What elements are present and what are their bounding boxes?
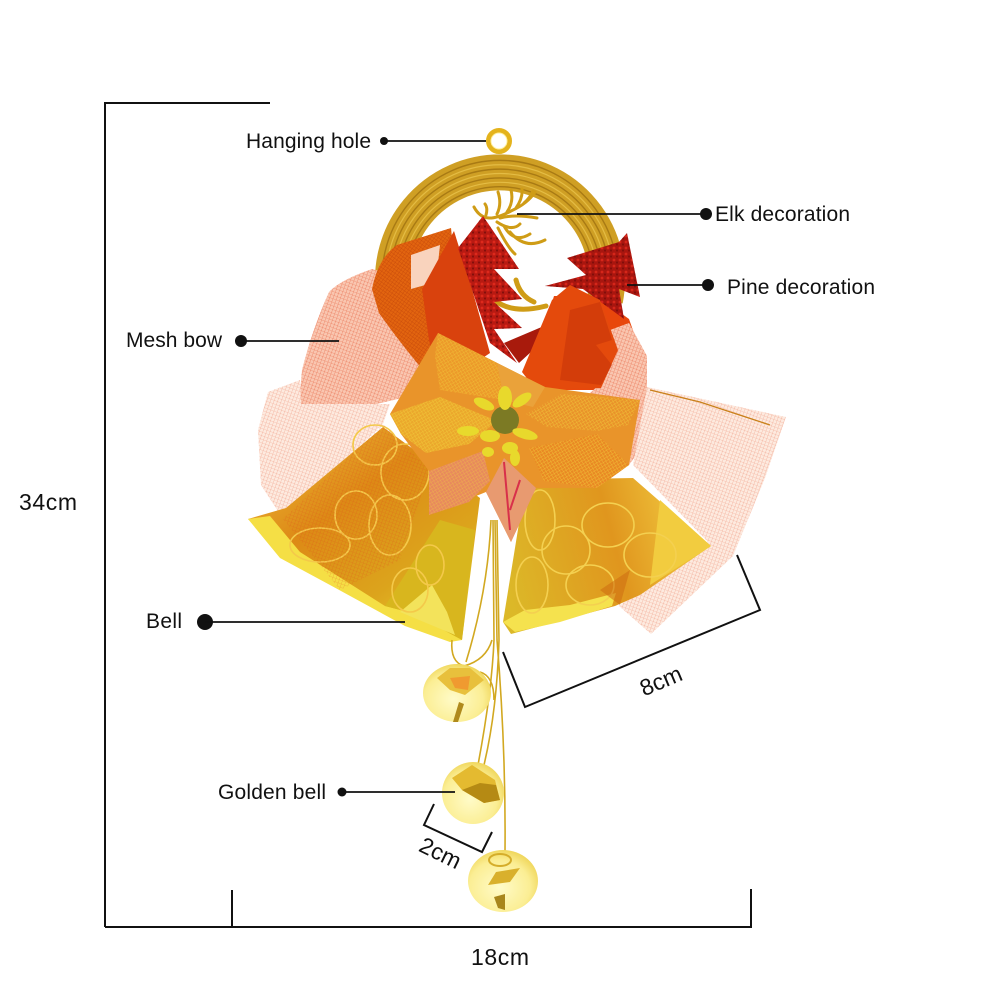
tree: right pine decoration [545, 233, 640, 319]
dimension: bell width 8cm [503, 555, 760, 707]
right deep-orange bow loop [536, 296, 647, 390]
tree: left pine decoration [458, 216, 522, 363]
golden ring [382, 160, 618, 300]
left lower mesh bow [258, 380, 390, 519]
jingle bell 1 [423, 664, 491, 722]
gold strings [452, 520, 505, 852]
callout: mesh bow: Mesh bow [126, 329, 223, 352]
dimension: jingle bell 2cm: 2cm [415, 832, 466, 874]
right center bow fold [522, 285, 618, 390]
right upper mesh bow [560, 323, 647, 465]
petal top left [435, 333, 504, 400]
petal bottom [486, 458, 536, 542]
flower center stamens [457, 386, 539, 466]
petal left [390, 397, 497, 453]
dimension: overall height 34cm [105, 103, 270, 927]
right lower mesh bow [619, 387, 786, 634]
callout: golden bell: Golden bell [218, 781, 326, 804]
jingle bell 2 [442, 762, 504, 824]
tree: small center [504, 326, 544, 363]
dimension: jingle bell 2cm [415, 804, 492, 874]
mesh over left bell [283, 424, 430, 590]
petal lower left [429, 451, 490, 515]
ornament [248, 130, 786, 912]
left upper mesh bow [299, 269, 436, 411]
hanging hole ring [488, 130, 510, 152]
petal right [526, 394, 640, 431]
dimension: bell width 8cm: 8cm [636, 660, 686, 701]
elk decoration [474, 189, 546, 309]
flower: poinsettia [390, 333, 640, 542]
flower base [390, 333, 640, 542]
right bell [503, 478, 711, 634]
callout: golden bell [218, 781, 455, 804]
petal lower right [529, 434, 629, 488]
bell scales [516, 490, 676, 613]
text: 34cm: 34cm [19, 489, 77, 515]
callout: bell [146, 610, 405, 633]
dimension: overall width 18cm [105, 889, 751, 927]
callout: hanging hole: Hanging hole [246, 130, 371, 153]
left center bow fold [422, 231, 490, 387]
callout: elk decoration [517, 203, 850, 226]
jingle bell 3 [468, 850, 538, 912]
petal top right [497, 363, 545, 407]
callout: mesh bow [126, 329, 339, 352]
callout: pine decoration [627, 276, 875, 299]
bell scales [290, 425, 444, 612]
callout: pine decoration: Pine decoration [727, 276, 875, 299]
text: 18cm: 18cm [471, 944, 529, 970]
left deep-orange bow loop [372, 228, 470, 390]
callout: hanging hole [246, 130, 486, 153]
left bell [248, 425, 480, 642]
callout: bell: Bell [146, 610, 182, 633]
callout: elk decoration: Elk decoration [715, 203, 850, 226]
